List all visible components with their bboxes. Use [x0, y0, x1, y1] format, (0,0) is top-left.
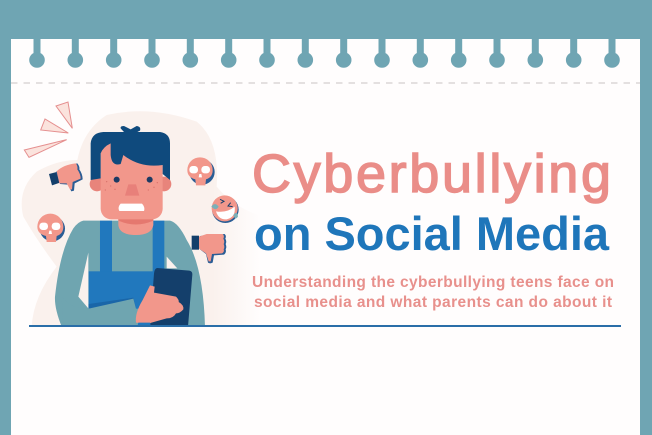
- skull right: [187, 157, 215, 185]
- neck: [118, 217, 153, 235]
- binding holes: [29, 38, 620, 68]
- subtitle line 2: social media and what parents can do about it: [254, 294, 612, 311]
- forearm: [62, 297, 140, 327]
- background blob: [22, 111, 260, 327]
- phone: [150, 268, 192, 327]
- head: [101, 143, 163, 219]
- freckles: [105, 181, 158, 191]
- subtitle line 1: Understanding the cyberbullying teens face on: [252, 274, 614, 291]
- thumbs down left: [49, 163, 83, 191]
- divider line: [29, 325, 621, 327]
- mouth: [119, 204, 144, 211]
- burst marks: [24, 102, 72, 157]
- hand: [136, 285, 183, 324]
- eyes: [114, 177, 120, 183]
- arm gaps: [78, 253, 88, 308]
- hair: [91, 126, 170, 180]
- illustration: worried teen with phone: [22, 102, 260, 327]
- title line 2: on Social Media: [254, 207, 610, 260]
- title line 1: Cyberbullying: [252, 144, 611, 204]
- thumbs down right: [192, 234, 226, 263]
- ears: [90, 177, 104, 191]
- sleeve cuff: [137, 323, 151, 327]
- overalls: [89, 221, 165, 309]
- laughing emoji: [211, 195, 239, 223]
- torso and arms: [55, 221, 205, 327]
- skull left: [37, 214, 65, 242]
- nose: [125, 184, 139, 196]
- title: [252, 144, 611, 260]
- subtitle: [252, 274, 614, 311]
- overalls shadow: [89, 298, 136, 309]
